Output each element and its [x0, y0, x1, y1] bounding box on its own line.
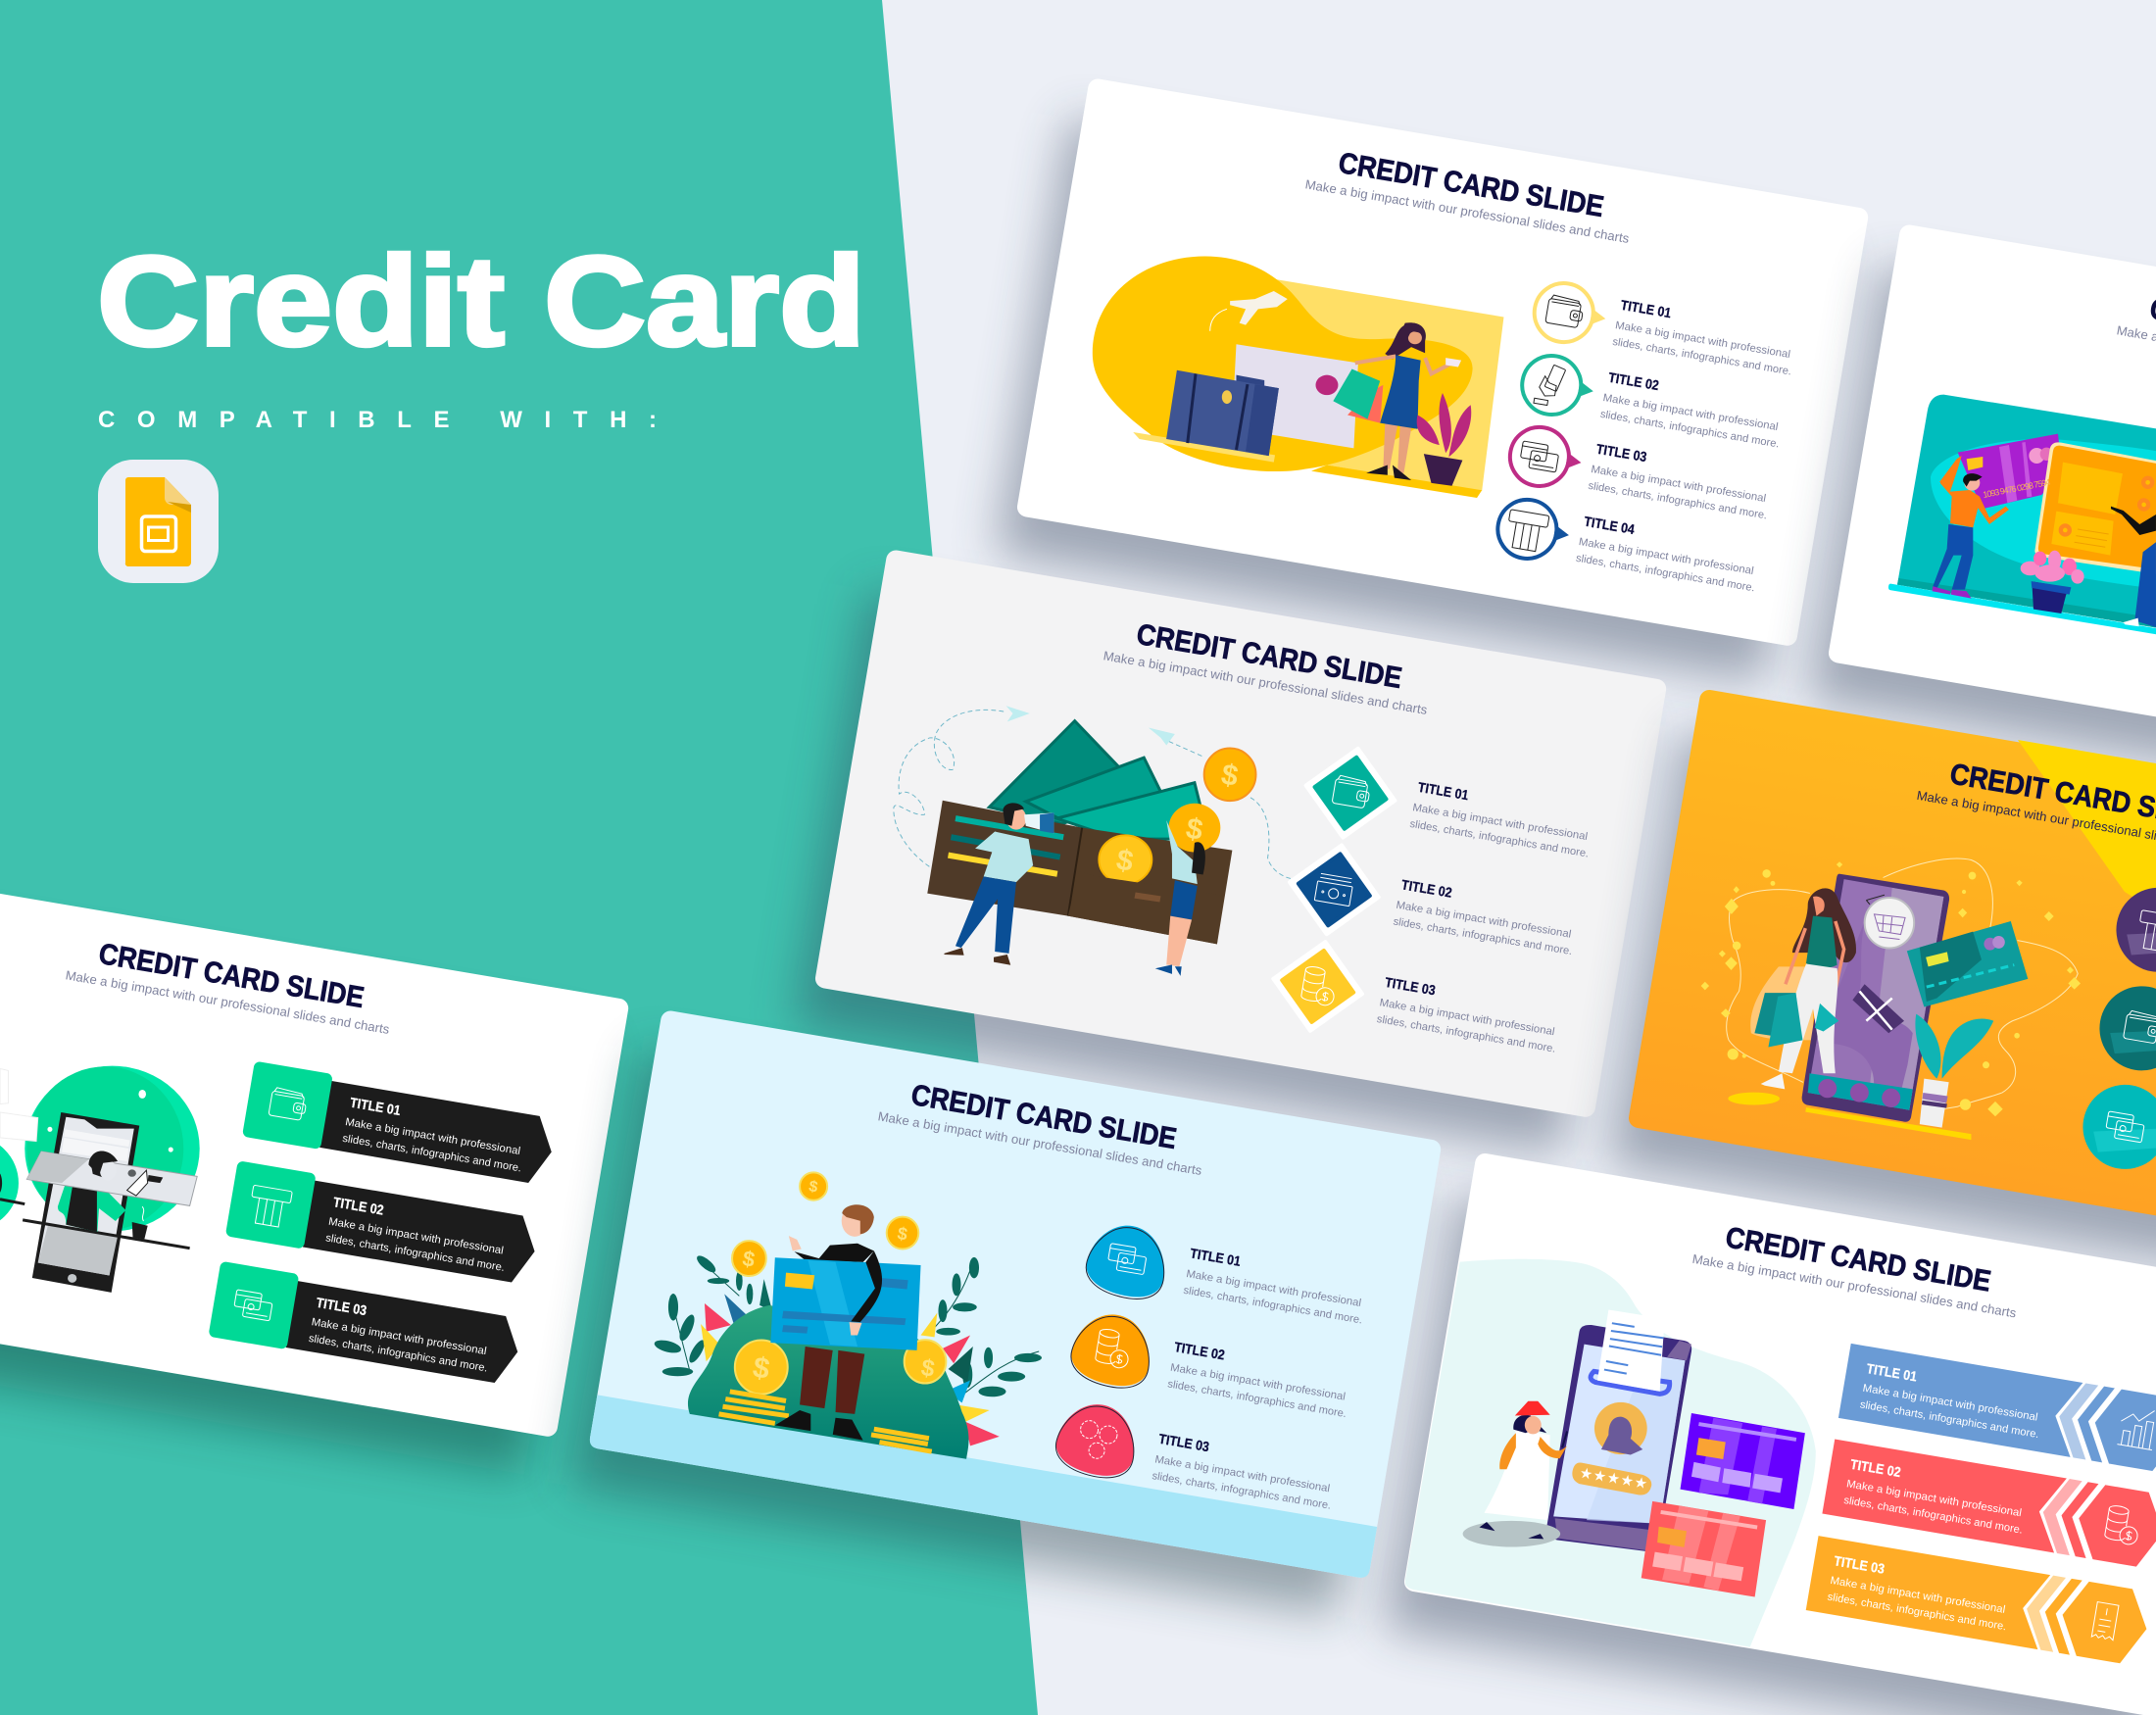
coin dollar signs: $: [896, 1223, 908, 1245]
panel: slide light blue: TITLE 02: [1173, 1339, 1226, 1363]
coin dollar signs: $: [1114, 844, 1136, 878]
panel: slide light blue: CREDIT CARD SLIDE: [908, 1079, 1179, 1155]
panel: slide left black arrows: TITLE 01: [349, 1095, 402, 1118]
panel: slide light blue: Make a big impact with our professional slides and charts: [877, 1108, 1203, 1178]
panel: slide top yellow: Make a big impact with professional: [1590, 464, 1767, 505]
panel: slide light blue: TITLE 01: [1189, 1245, 1242, 1269]
panel: slide grey wallet: Make a big impact with professional: [1379, 997, 1555, 1038]
panel: slide left black arrows: Make a big impact with professional: [344, 1116, 521, 1157]
panel: slide mint phone: slides, charts, infographics and more.: [1827, 1592, 2007, 1633]
panel: slide grey wallet: slides, charts, infographics and more.: [1376, 1013, 1556, 1055]
panel: slide top yellow: TITLE 01: [1620, 297, 1673, 320]
yellow corner: [2018, 740, 2156, 911]
coin dollar signs: $: [808, 1178, 819, 1197]
panel: slide left black arrows: Make a big impact with professional: [327, 1216, 505, 1257]
illustration: people with giant card: [1888, 395, 2156, 637]
coin dollar signs: $: [741, 1246, 757, 1272]
panel: slide top yellow: TITLE 04: [1583, 514, 1636, 537]
panel: slide top yellow: TITLE 03: [1595, 441, 1648, 465]
coin dollar signs: $: [1184, 812, 1205, 847]
panel: slide top yellow: slides, charts, infographics and more.: [1611, 336, 1792, 378]
panel: slide left black arrows: CREDIT CARD SLIDE: [96, 938, 367, 1014]
panel: slide top right teal: [1807, 221, 2156, 834]
panel: slide light blue: TITLE 03: [1157, 1431, 1210, 1454]
panel: slide top yellow: slides, charts, infographics and more.: [1588, 480, 1768, 521]
panel: slide mint phone: slides, charts, infographics and more.: [1842, 1494, 2024, 1537]
panel: slide grey wallet: Make a big impact with professional: [1411, 802, 1589, 843]
panel: slide mint phone: [1383, 1150, 2156, 1715]
panel: slide left black arrows: Make a big impact with professional: [311, 1316, 487, 1357]
panel: slide top yellow: TITLE 02: [1607, 369, 1660, 393]
illustration: man with phone and card: [0, 1066, 200, 1293]
panel: slide mint phone: TITLE 02: [1849, 1456, 1902, 1480]
star rating: ★★★★★: [1578, 1464, 1648, 1493]
panel: slide top yellow: CREDIT CARD SLIDE: [1336, 147, 1606, 223]
panel: slide top yellow: Make a big impact with our professional slides and charts: [1304, 176, 1631, 246]
panel: slide left black arrows: TITLE 02: [332, 1194, 385, 1218]
panel: slide mint phone: TITLE 03: [1833, 1552, 1886, 1577]
illustration: wallet with money and people: [894, 706, 1291, 976]
panel: slide grey wallet: slides, charts, infographics and more.: [1393, 915, 1573, 957]
panel: slide grey wallet: CREDIT CARD SLIDE: [1134, 618, 1404, 695]
panel: slide top yellow: slides, charts, infographics and more.: [1575, 553, 1756, 594]
panel: slide top yellow: [996, 75, 1870, 688]
panel: slide grey wallet: [794, 547, 1668, 1159]
panel: slide left black arrows: slides, charts, infographics and more.: [324, 1232, 506, 1274]
icon: google slides: [98, 460, 219, 583]
panel: slide light blue: slides, charts, infographics and more.: [1166, 1378, 1348, 1420]
panel: slide grey wallet: slides, charts, infographics and more.: [1409, 818, 1590, 860]
coin dollar signs: $: [919, 1354, 937, 1383]
coin dollar signs: [1114, 759, 1241, 878]
panel: slide left black arrows: [0, 866, 630, 1479]
panel: slide mint phone: Make a big impact with our professional slides and charts: [1691, 1251, 2018, 1321]
teal panel: [0, 0, 1038, 1715]
panel: slide top yellow: 12534: [1326, 416, 1345, 425]
panel: slide left black arrows: slides, charts, infographics and more.: [308, 1333, 488, 1375]
panel: slide mint phone: Make a big impact with professional: [1845, 1478, 2023, 1519]
panel: slide left black arrows: TITLE 03: [316, 1295, 368, 1318]
coin dollar signs: $: [751, 1351, 772, 1386]
panel: slide grey wallet: TITLE 03: [1384, 974, 1437, 998]
panel: slide orange: [1607, 686, 2156, 1298]
illustration: phone and cards: [1405, 1259, 1816, 1647]
panel: slide light blue: Make a big impact with professional: [1169, 1362, 1347, 1403]
card number text: 1093 9476 0298 7594: [1982, 477, 2051, 500]
panel: slide mint phone: Make a big impact with professional: [1830, 1575, 2006, 1616]
panel: slide top yellow: 0000: [1298, 411, 1315, 420]
panel: slide left black arrows: slides, charts, infographics and more.: [342, 1133, 522, 1174]
panel: slide light blue: slides, charts, infographics and more.: [1152, 1470, 1332, 1512]
panel: slide mint phone: CREDIT CARD SLIDE: [1723, 1221, 1993, 1298]
panel: slide top yellow: Make a big impact with professional: [1614, 319, 1791, 361]
panel: slide top yellow: slides, charts, infographics and more.: [1599, 409, 1780, 450]
panel: slide top yellow: Make a big impact with professional: [1602, 392, 1779, 433]
panel: slide light blue: slides, charts, infographics and more.: [1183, 1285, 1363, 1326]
panel: slide grey wallet: TITLE 01: [1417, 779, 1470, 803]
panel: slide top yellow: Make a big impact with professional: [1578, 536, 1754, 577]
coin dollar signs: $: [1219, 759, 1241, 793]
panel: slide grey wallet: TITLE 02: [1400, 876, 1453, 901]
main title: Credit Card: [97, 229, 865, 372]
coin dollar signs: [741, 1178, 937, 1386]
panel: slide mint phone: Make a big impact with professional: [1862, 1383, 2038, 1424]
panel: slide light blue: [568, 1007, 1443, 1620]
panel: slide grey wallet: Make a big impact with our professional slides and charts: [1102, 648, 1429, 717]
illustration: shopper and suitcase: [1093, 256, 1503, 498]
panel: slide mint phone: slides, charts, infographics and more.: [1859, 1398, 2039, 1441]
panel: slide light blue: Make a big impact with professional: [1153, 1453, 1331, 1494]
compatible with label: COMPATIBLE WITH:: [98, 407, 657, 433]
panel: slide mint phone: TITLE 01: [1865, 1360, 1919, 1385]
illustration: shopper with phone: [1701, 858, 2081, 1140]
panel: slide light blue: Make a big impact with professional: [1185, 1268, 1362, 1309]
panel: slide left black arrows: Make a big impact with our professional slides and charts: [65, 967, 391, 1037]
illustration: man holding card with coins: [652, 1172, 1042, 1459]
panel: slide grey wallet: Make a big impact with professional: [1396, 900, 1572, 941]
